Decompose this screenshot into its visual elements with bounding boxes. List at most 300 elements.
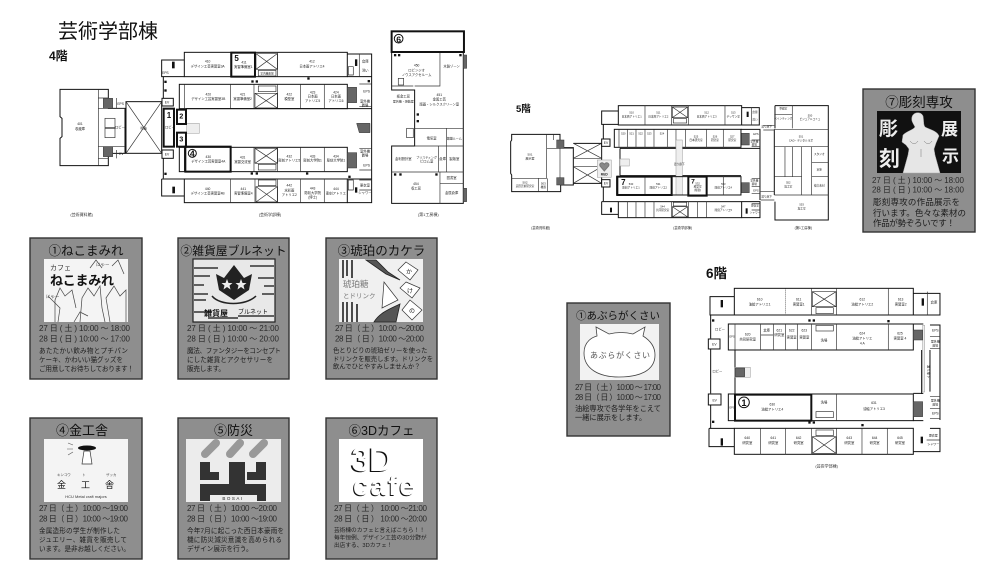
top room row: 613 [898,298,904,302]
top room row: 513 [731,111,736,115]
factory building: 渡り廊下 [761,195,772,199]
top room row: 日本画アトリエ1 [622,114,642,118]
card: 彫刻専攻: 彫刻専攻の作品展示を [873,197,960,207]
factory building: ロビンジオ [408,67,425,72]
left and right halls: 倉庫 [931,299,938,304]
illustration: 3D cafe lettering: 3D [352,441,394,479]
card: あぶらがくさい: 28 日（ 日 ）10:00 ～ 17:00 [575,393,662,402]
building captions: (芸術学部棟) [673,225,692,230]
left and right stair halls: 倉庫 [362,59,369,64]
factory building: 版画・シルクスクリーン室 [419,101,460,106]
bottom room row: アトリエ2 [282,192,297,197]
floor plan: 5th floor [511,106,828,230]
card: 防災: デザイン展示を行う。 [187,544,253,553]
card: 彫刻専攻: 27 日 ( 土 ) 10:00 ～ 18:00 [872,175,965,185]
second room row: 倉庫 [763,327,771,332]
factory building: 550 [808,113,813,117]
left and right stair halls: EPS [162,71,169,75]
second room row: 研究室 [728,138,737,142]
bottom room row: 研究室 [768,440,779,445]
side halls: 倉庫 [752,110,758,114]
bottom room row: 研究室 [794,440,804,445]
left and right stair halls: 室外機 [360,99,371,104]
factory building [761,106,828,220]
card: ねこまみれ: 28 日 ( 日 ) 10:00 ～ 17:00 [39,334,131,344]
second room row: 日本画 [331,94,342,99]
bottom room row: 643 [847,436,852,440]
heading: 4th floor: 4階 [49,49,68,63]
left and right halls: ロビー [715,327,725,332]
central courtyard and lobby: EV [165,100,170,104]
title: 芸術学部棟 [58,20,158,43]
card: 防災 [178,418,289,559]
illustration: cats [44,259,128,322]
second room row: 4 A [860,342,866,346]
illustration: hammer logo: ザッカ [106,472,116,477]
side halls: EPS [753,189,759,193]
card: 金工舎: ④金工舎 [56,423,108,438]
second room row: 実習室 [787,334,797,339]
third room row: 油絵アトリエ3 [863,406,885,411]
illustration: 3D cafe lettering [339,439,423,502]
factory building: 552 [786,181,791,185]
card: あぶらがくさい [567,303,670,436]
illustration: amber: け [407,288,413,295]
second room row: 日本研究室 [689,138,703,142]
card: 雑貨屋ブルネット: 27 日 ( 土 ) 10:00 ～ 21:00 [187,323,280,333]
second room row: 424 [333,90,339,94]
bottom room row: 研究室 [895,440,906,445]
factory building: 製版室 [449,156,460,161]
bridge with voids and heart logo: EV [604,141,609,145]
left and right stair halls [162,54,372,203]
illustration: hammer logo [44,439,128,502]
factory building: ノウスアクセルーム [402,72,432,77]
second room row [614,129,741,147]
building captions [70,211,439,217]
highlight 2 [177,110,186,124]
bottom room row: 547 [721,204,726,208]
annex building 401 [60,89,125,166]
bottom room row: 彫刻アトリエ [326,191,347,196]
factory building: 電気室 [427,135,437,140]
illustration: Venus statue [877,111,961,173]
card: 金工舎: 27 日（ 土 ）10:00 ～19:00 [39,503,129,513]
annex building: 503 [541,181,546,185]
factory building: 収工房 [411,186,422,191]
bottom room row: 共同研究室 [656,208,670,212]
illustration: 3D cafe lettering: cafe [352,471,414,502]
left and right halls: EPS [932,329,939,333]
central courtyard and lobby: ロビー [165,125,175,130]
highlight 7 room 532: 7 [691,179,695,186]
illustration: amber: とドリンク [343,292,376,300]
card: 3Dカフェ: 芸術棟のカフェと言えばこちら！！ [334,526,425,534]
factory building: ブリスティング [416,154,437,159]
central courtyard [712,325,931,394]
building captions [531,225,812,230]
second room row: アトリエ5 [305,98,320,103]
annex building [511,134,573,192]
card: ねこまみれ: 27 日 ( 土 ) 10:00 ～ 18:00 [39,323,131,333]
central courtyard: ロビー [712,369,722,374]
left and right halls [708,292,940,452]
second room row: 423 [310,90,316,94]
second room row: デザイン工芸実習室3B [191,96,226,101]
central corridor [620,140,760,195]
top room row: 実習準備室1 [234,64,253,69]
illustration: Venus statue: 刻 [879,148,900,171]
bottom room row [618,202,742,218]
bottom room row: 640 [745,436,750,440]
third room row: 532 [695,181,700,185]
illustration: amber: か [406,269,412,276]
bottom room row: (博士) [308,195,317,200]
annex building 401: ロビー [115,124,125,129]
left and right stair halls: 更衣室 [360,183,371,188]
card: 防災: 機に防災減災意識を高められる [187,535,282,544]
third room row: 彫刻大学院1 [303,158,322,163]
top room row: 日本画アトリエ2 [648,114,669,118]
top room row: 油絵アトリエ1 [749,302,771,307]
card: 雑貨屋ブルネット: 販売します。 [187,364,225,373]
factory building: ペインティング [774,116,793,120]
heading: 6th floor: 6階 [706,266,728,281]
illustration: BOSAI logo: BOSAI [222,496,244,501]
illustration: cats: にゃー [46,294,60,300]
second room row: 523 [647,131,652,135]
annex building: 501 [528,153,533,157]
third room row: 彫刻大学院1 [327,158,345,163]
second room row: 実習準備室2 [233,96,252,101]
card: 彫刻専攻: 行います。色々な素材の [873,208,966,218]
top room row: 511 [656,111,661,115]
illustration: 3D cafe lettering: 3D [350,442,392,480]
second room row: 研究室 [711,138,719,142]
card: 琥珀のカケラ: 28 日（ 日 ）10:00 ～20:00 [335,334,425,344]
factory building: 451 [437,93,442,97]
illustration: Venus statue: 展 [941,120,958,139]
highlight 3: 3 [179,134,183,143]
building captions: (芸術資料館) [531,225,550,230]
left and right stair halls: EPS [363,164,371,168]
second room row: 日本画 [308,94,318,99]
third room row: 彫刻アトリエ4 [715,186,733,190]
bottom room row: 644 [872,436,878,440]
second room row: 526 [713,135,718,139]
annex building: 502 [523,180,528,184]
top room row: 611 [796,298,801,302]
side halls: EPS [753,132,759,136]
left and right stair halls: 洗い [362,67,369,72]
top room row: 411 [241,60,247,64]
second room row: 422 [287,92,292,96]
top room row: デザイン工芸実習室3A [191,63,225,68]
building captions: (第1工房棟) [418,211,439,217]
highlight 7 rooms 530-531 [617,177,672,195]
illustration: hammer logo: キンコウ [57,472,71,477]
highlight 4 room 430: 4 [190,149,195,159]
third room row [179,147,357,172]
left and right halls: 置場 [932,343,938,348]
illustration: cats: ねこまみれ [50,273,114,288]
illustration: Venus statue: 彫 [879,118,898,140]
second room row [179,84,357,109]
left and right stair halls: EPS [363,90,371,94]
top room row: 612 [860,298,865,302]
left and right halls: EV [712,398,718,402]
bottom room row: 441 [241,187,246,191]
factory building: スタジオ [814,152,825,156]
bottom room row: 443 [310,186,316,190]
left and right stair halls: 置場 [362,153,369,158]
factory building: 室外機・焼鈍室 [393,99,414,104]
bottom room row: デザイン工芸実習室4B [191,191,225,196]
card: 防災: 28 日（ 日 ）10:00 ～19:00 [187,514,278,524]
top room row: 日本画アトリエ4 [299,63,325,68]
card: 琥珀のカケラ: ドリンクを販売します。ドリンクを [333,354,433,363]
top room row: 512 [704,111,709,115]
card: 琥珀のカケラ: ③琥珀のカケラ [338,244,425,258]
second room row: 模型室 [284,96,295,101]
illustration: hammer logo: ト [82,473,86,477]
card: 3Dカフェ: 毎年恒例、デザイン工芸の3D分野が [334,534,427,542]
illustration: amber [339,259,423,322]
factory building: 454 [413,182,419,186]
building caption: (芸術学部棟) [815,463,839,469]
second room row: 研究室 [774,332,785,337]
bridge with void [126,102,162,153]
third room row: 彫刻アトリエ2 [650,186,668,190]
card: ねこまみれ: ご用意してお待ちしております！ [39,364,134,373]
annex building 401: 401 [77,122,83,126]
highlight 5 room 411 [231,53,255,77]
factory building: 551 [799,135,804,139]
third room row: 433 [310,154,316,158]
top room row [618,106,742,125]
factory building: 図書室 [447,175,457,180]
bottom room row: 実習準備室4 [234,191,253,196]
side halls [602,108,761,218]
card: 琥珀のカケラ: 色とりどりの琥珀ゼリーを使った [333,346,427,354]
heading: 5th floor: 5階 [516,103,531,115]
illustration: hammer logo: 舎 [105,480,114,490]
bottom room row: 440 [205,187,211,191]
third room row: 油絵アトリエ4 [761,407,783,412]
second room row: 524 [660,131,665,135]
bridge with voids and heart logo [573,139,611,187]
card: 雑貨屋ブルネット: にした雑貨とアクセサリーを [187,355,273,364]
third room row: 630 [770,402,775,406]
floor plan: 4th floor [60,31,467,217]
card: ねこまみれ: ①ねこまみれ [48,244,124,258]
highlight 1 room 630 [735,395,811,421]
bottom room row: 研究室 [742,440,753,445]
illustration: crest: ブルネット [238,308,268,316]
card: 琥珀のカケラ: 27 日（ 土 ）10:00 ～20:00 [335,323,425,333]
second room row: 522 [638,131,643,135]
second room row: 623 [802,328,807,332]
left and right halls: EPS [932,411,939,415]
card: 3Dカフェ: ⑥3Dカフェ [349,424,414,438]
illustration: crest [193,259,275,322]
second room row: 620 [745,332,751,336]
bottom room row: 彫刻アトリエ5 [715,208,733,212]
bottom room row: 642 [796,436,802,440]
highlight 7 room 532 [688,177,707,196]
second room row: 420 [206,92,211,96]
third room row: 531 [656,182,661,186]
factory building: 鍛鑞ルーム [447,135,462,140]
second room row: 421 [240,92,246,96]
top room row: 油絵アトリエ2 [851,302,873,307]
bottom room row: 645 [897,436,903,440]
bottom room row [734,428,913,454]
third room row: 434 [333,154,339,158]
top room row [184,52,347,77]
annex building: 機器 [541,185,546,189]
card: 雑貨屋ブルネット [178,238,289,379]
card: 金工舎: ジュエリー、雑貨を販売して [39,535,127,544]
illustration: hammer logo: 金 [57,479,66,490]
top room row: 実習室1 [793,302,805,307]
third room row: 模型室 [694,185,702,189]
second room row: 622 [789,328,795,332]
central courtyard and lobby: EV [165,152,170,156]
second room row: 624 [860,332,865,336]
left and right stair halls: シャワー [358,190,372,195]
top room row: 412 [309,60,315,64]
building captions: (芸術学部棟) [259,211,282,217]
highlight 3 [177,133,186,147]
floor plan: 6th floor [708,288,940,469]
third room row: 631 [871,401,877,405]
highlight 1 lobby: 1 [167,111,172,120]
card: 防災: ⑤防災 [214,423,253,438]
card: 彫刻専攻: 28 日 ( 日 ) 10:00 ～ 18:00 [872,186,965,194]
third room row: 実習交流室 [234,159,252,164]
highlight 1 room 630: 1 [741,398,747,408]
bottom room row [184,179,347,203]
card: あぶらがくさい: 一緒に展示をします。 [575,413,646,422]
third room row: EPS [729,405,735,409]
second room row: 洗場 [821,338,828,343]
factory building: 金利設計室 [395,156,412,161]
building captions: (第1工房棟) [795,225,812,230]
left and right halls: 更衣室 [929,433,938,438]
central courtyard: 渡り廊下 [926,365,931,379]
factory building: CAD・デジタルラボ [789,138,813,142]
top room row: 610 [757,298,763,302]
factory building: 準備室 [779,107,788,111]
factory building: 金属倉庫 [445,190,459,195]
top room row: 510 [629,111,634,115]
third room row [728,394,913,421]
building captions: (芸術資料館) [70,211,94,217]
illustration: 3D cafe lettering: cafe [353,470,415,501]
second room row: 521 [629,131,634,135]
card: 彫刻専攻: ⑦彫刻専攻 [885,95,953,110]
highlight 1 lobby [164,109,174,147]
left and right stair halls: 室外機 [360,149,371,154]
factory building: 倉庫 [439,156,447,161]
bottom room row: 水彩画 [284,187,295,192]
factory building: ビロム室 [420,159,434,164]
factory building [392,52,467,203]
illustration: amber: の [409,308,415,315]
annex building: 造形芸術研究室 [516,184,535,188]
third room row: 430 [206,155,211,159]
illustration: cats: カフェ [50,264,71,272]
left and right halls: 室外機 [931,339,940,344]
highlight 5 room 411: 5 [234,54,239,63]
card: あぶらがくさい: 27 日（ 土 ）10:00 ～ 17:00 [575,382,662,392]
side halls: 室外機 [750,179,759,183]
factory building: 渡り廊下 [761,124,772,128]
card: 彫刻専攻: 作品が勢ぞろいです！ [873,218,955,228]
bottom room row: 研究室 [844,440,855,445]
second room row: 621 [777,328,782,332]
illustration: cats: にゃー [96,262,110,268]
annex building 401: EPS [117,102,125,106]
factory building: 木製ゾーン [443,63,461,68]
card: 琥珀のカケラ: 飲んでひとやすみしませんか？ [333,362,420,370]
second room row: 520 [621,131,626,135]
third room row: 533 [721,182,726,186]
side halls: シャワー [750,210,761,214]
second room row: EPS [729,334,735,338]
third room row: 彫刻アトリエ5 [278,158,300,163]
bottom room row: 442 [287,184,292,188]
card: 金工舎: 金属造形の学生が制作した [39,526,120,535]
second room row [728,324,913,350]
side halls: 置場 [752,182,757,186]
bottom room row: 彫刻大学院 [304,190,322,195]
factory building: 加工室 [798,206,806,210]
card: ねこまみれ: あたたかい飲み物とプチパン [39,346,128,355]
bottom room row: 研究室 [870,440,880,445]
second room row: 油絵アトリエ [852,336,873,341]
left and right halls: EV [712,342,717,346]
top room row: 実習室2 [895,302,907,307]
card: 3Dカフェ: 27 日（ 土 ） 10:00 ～21:00 [334,503,428,513]
highlight 4 room 430 [185,147,231,172]
factory building: 450 [414,64,420,68]
left and right halls: 置場 [932,402,938,407]
highlight 6 roof [392,31,464,52]
factory building: 倉庫 [817,167,822,171]
bridge with voids and heart logo: RED [601,173,608,177]
card: 防災: 27 日（ 土 ）10:00 ～20:00 [187,503,278,513]
top room row: 日本画アトリエ3 [697,114,717,118]
card: 雑貨屋ブルネット: ②雑貨屋ブルネット [180,244,287,258]
card: 雑貨屋ブルネット: 28 日 ( 日 ) 10:00 ～ 20:00 [187,334,280,344]
third room row: 洗場 [821,399,828,404]
second room row: アトリエ6 [328,98,344,103]
card: 彫刻専攻 [863,89,975,232]
illustration: cat face: あぶらがくさい [590,350,650,360]
illustration: Venus statue: 示 [942,147,959,166]
second room row: 525 [694,135,699,139]
second room row: 実習室 4 [894,336,907,341]
left and right halls: シャワー [927,441,939,446]
third room row: 530 [629,182,634,186]
bottom room row: 444 [333,187,339,191]
third room row: 432 [287,154,292,158]
card: ねこまみれ [30,238,142,379]
side halls: 洗い [752,117,758,121]
card: 3Dカフェ: 28 日（ 日 ） 10:00 ～20:00 [334,514,428,524]
